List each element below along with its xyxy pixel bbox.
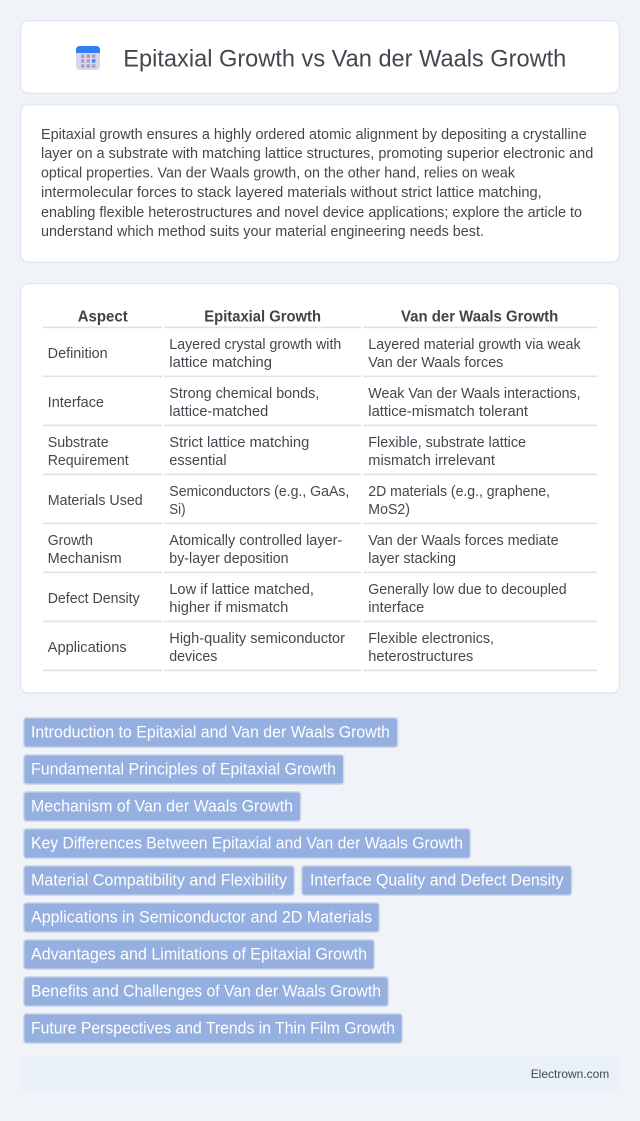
- tag: key differences: Key Differences Between Epitaxial and Van der Waals Growth: [31, 835, 463, 853]
- intro text block: understand which method suits your material engineering needs best.: [41, 224, 484, 240]
- row: Applications: heterostructures: [368, 649, 473, 665]
- tag: applications: Applications in Semiconductor and 2D Materials: [31, 909, 372, 927]
- tag: fundamental principles: [24, 755, 344, 784]
- tag: introduction: Introduction to Epitaxial and Van der Waals Growth: [31, 724, 390, 742]
- row: Interface: Strong chemical bonds,: [169, 386, 319, 402]
- row: Substrate Requirement: Strict lattice matching: [169, 435, 309, 451]
- row: Definition: Layered crystal growth with: [169, 337, 341, 353]
- tag: future perspectives: [24, 1014, 402, 1043]
- row: Substrate Requirement: [43, 435, 597, 475]
- tag: introduction: [24, 718, 398, 747]
- row: Applications: Flexible electronics,: [368, 631, 494, 647]
- intro text block: [41, 127, 593, 240]
- row: Materials Used: Si): [169, 502, 186, 518]
- row: Applications: [43, 631, 597, 671]
- tag: material compatibility: [24, 866, 294, 895]
- tag: material compatibility: Material Compatibility and Flexibility: [31, 872, 288, 890]
- row: Applications: devices: [169, 649, 217, 665]
- row: Interface: Weak Van der Waals interactions,: [368, 386, 581, 402]
- tag: interface quality: Interface Quality and Defect Density: [310, 872, 564, 890]
- row: Substrate Requirement: Flexible, substrate lattice: [368, 435, 526, 451]
- row: Growth Mechanism: Growth: [48, 533, 93, 549]
- tag: advantages: Advantages and Limitations of Epitaxial Growth: [31, 946, 367, 964]
- tag: future perspectives: Future Perspectives and Trends in Thin Film Growth: [31, 1020, 395, 1038]
- panel: header: [20, 21, 620, 93]
- tag: applications: [24, 903, 379, 932]
- row: Materials Used: Materials Used: [48, 493, 143, 509]
- row: Growth Mechanism: [43, 533, 597, 573]
- panel: comparison table: [20, 284, 620, 693]
- row: Substrate Requirement: mismatch irrelevant: [368, 453, 495, 469]
- topic tags: [24, 718, 572, 1043]
- row: Defect Density: Defect Density: [48, 591, 141, 607]
- row: Materials Used: MoS2): [368, 502, 410, 518]
- tag: fundamental principles: Fundamental Principles of Epitaxial Growth: [31, 761, 336, 779]
- row: Definition: Layered material growth via weak: [368, 337, 581, 353]
- tag: advantages: [24, 940, 374, 969]
- title: Epitaxial Growth vs Van der Waals Growth: [123, 46, 566, 73]
- intro text block: intermolecular forces to stack layered materials without strict lattice matching,: [41, 185, 542, 201]
- row: Interface: Interface: [48, 395, 104, 411]
- panel: introduction: [20, 104, 620, 262]
- tag: mechanism: [24, 792, 301, 821]
- tag: benefits: Benefits and Challenges of Van der Waals Growth: [31, 983, 381, 1001]
- row: Applications: High-quality semiconductor: [169, 631, 345, 647]
- row: Definition: Van der Waals forces: [368, 355, 503, 371]
- row: Growth Mechanism: Mechanism: [48, 551, 122, 567]
- tag: key differences: [24, 829, 470, 858]
- table header row: Epitaxial Growth: [204, 308, 321, 325]
- row: Substrate Requirement: Requirement: [48, 453, 129, 469]
- row: Substrate Requirement: Substrate: [48, 435, 109, 451]
- row: Growth Mechanism: Van der Waals forces mediate: [368, 533, 559, 549]
- row: Growth Mechanism: layer stacking: [368, 551, 456, 567]
- row: Defect Density: [43, 582, 597, 622]
- tag: benefits: [24, 977, 388, 1006]
- row: Defect Density: higher if mismatch: [169, 600, 288, 616]
- table header row: Aspect: [78, 308, 128, 325]
- row: Growth Mechanism: by-layer deposition: [169, 551, 289, 567]
- row: Applications: Applications: [48, 640, 127, 656]
- row: Definition: Definition: [48, 346, 108, 362]
- intro text block: enabling flexible heterostructures and novel device applications; explore the article to: [41, 205, 582, 221]
- footer: Electrown.com: [531, 1067, 609, 1081]
- tag: mechanism: Mechanism of Van der Waals Growth: [31, 798, 293, 816]
- footer: [20, 1057, 620, 1091]
- intro text block: optical properties. Van der Waals growth, on the other hand, relies on weak: [41, 166, 516, 182]
- row: Definition: lattice matching: [169, 355, 272, 371]
- row: Defect Density: Generally low due to decoupled: [368, 582, 567, 598]
- row: Interface: [43, 386, 597, 426]
- row: Interface: lattice-matched: [169, 404, 268, 420]
- row: Defect Density: Low if lattice matched,: [169, 582, 314, 598]
- table header row: [43, 308, 597, 328]
- intro text block: layer on a substrate with matching lattice structures, promoting superior electronic and: [41, 146, 593, 162]
- icon: calendar: [76, 46, 100, 70]
- row: Growth Mechanism: Atomically controlled layer-: [169, 533, 343, 549]
- row: Definition: [43, 337, 597, 377]
- row: Substrate Requirement: essential: [169, 453, 227, 469]
- table header row: Van der Waals Growth: [401, 308, 558, 325]
- row: Interface: lattice-mismatch tolerant: [368, 404, 528, 420]
- row: Materials Used: [43, 484, 597, 524]
- row: Materials Used: 2D materials (e.g., graphene,: [368, 484, 550, 500]
- intro text block: Epitaxial growth ensures a highly ordered atomic alignment by depositing a crystalline: [41, 127, 587, 143]
- tag: interface quality: [302, 866, 572, 895]
- row: Defect Density: interface: [368, 600, 424, 616]
- row: Materials Used: Semiconductors (e.g., GaAs,: [169, 484, 349, 500]
